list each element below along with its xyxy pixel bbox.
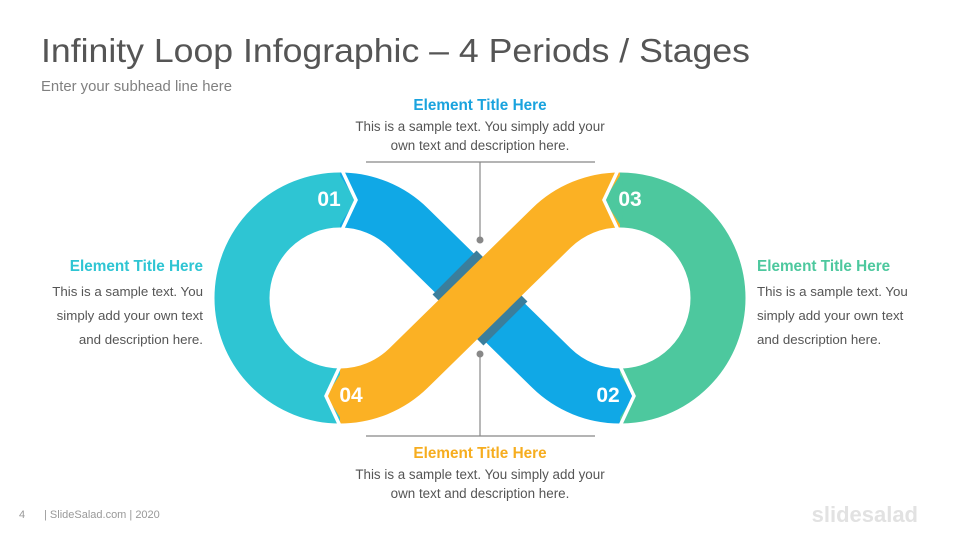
number labels: 04	[339, 384, 363, 407]
ring: right green	[620, 200, 718, 396]
text block: bottom: This is a sample text. You simply add your	[355, 467, 605, 482]
text block: right: simply add your own text	[757, 308, 904, 323]
text block: left: simply add your own text	[57, 308, 203, 323]
subhead: Enter your subhead line here	[41, 79, 232, 95]
title: Infinity Loop Infographic – 4 Periods / Stages	[41, 32, 750, 69]
chevron joints	[336, 172, 356, 228]
text block: top: own text and description here.	[391, 138, 569, 153]
text block: left: Element Title Here	[70, 258, 203, 275]
number labels	[317, 188, 642, 407]
text block: right: and description here.	[757, 332, 881, 347]
logo: slidesalad	[812, 502, 918, 527]
text block: top	[355, 97, 605, 153]
band: blue	[340, 200, 620, 396]
shadow at crossing	[458, 276, 502, 320]
text block: right	[757, 258, 908, 347]
connector bottom	[366, 350, 595, 436]
text block: bottom	[355, 445, 605, 501]
number labels: 02	[596, 384, 620, 407]
ring: left teal	[242, 200, 340, 396]
number labels: 03	[618, 188, 642, 211]
text block: left: This is a sample text. You	[52, 284, 203, 299]
text block: left	[52, 258, 203, 347]
text block: right: This is a sample text. You	[757, 284, 908, 299]
text block: bottom: Element Title Here	[413, 445, 547, 462]
footer: 4	[19, 509, 25, 521]
text block: bottom: own text and description here.	[391, 486, 569, 501]
number labels: 01	[317, 188, 341, 211]
connector top	[366, 162, 595, 244]
text block: left: and description here.	[79, 332, 203, 347]
band: orange	[340, 200, 620, 396]
footer: | SlideSalad.com | 2020	[44, 509, 160, 521]
text block: top: Element Title Here	[413, 97, 547, 114]
infinity loop	[242, 168, 718, 428]
text block: top: This is a sample text. You simply add your	[355, 119, 605, 134]
text block: right: Element Title Here	[757, 258, 890, 275]
